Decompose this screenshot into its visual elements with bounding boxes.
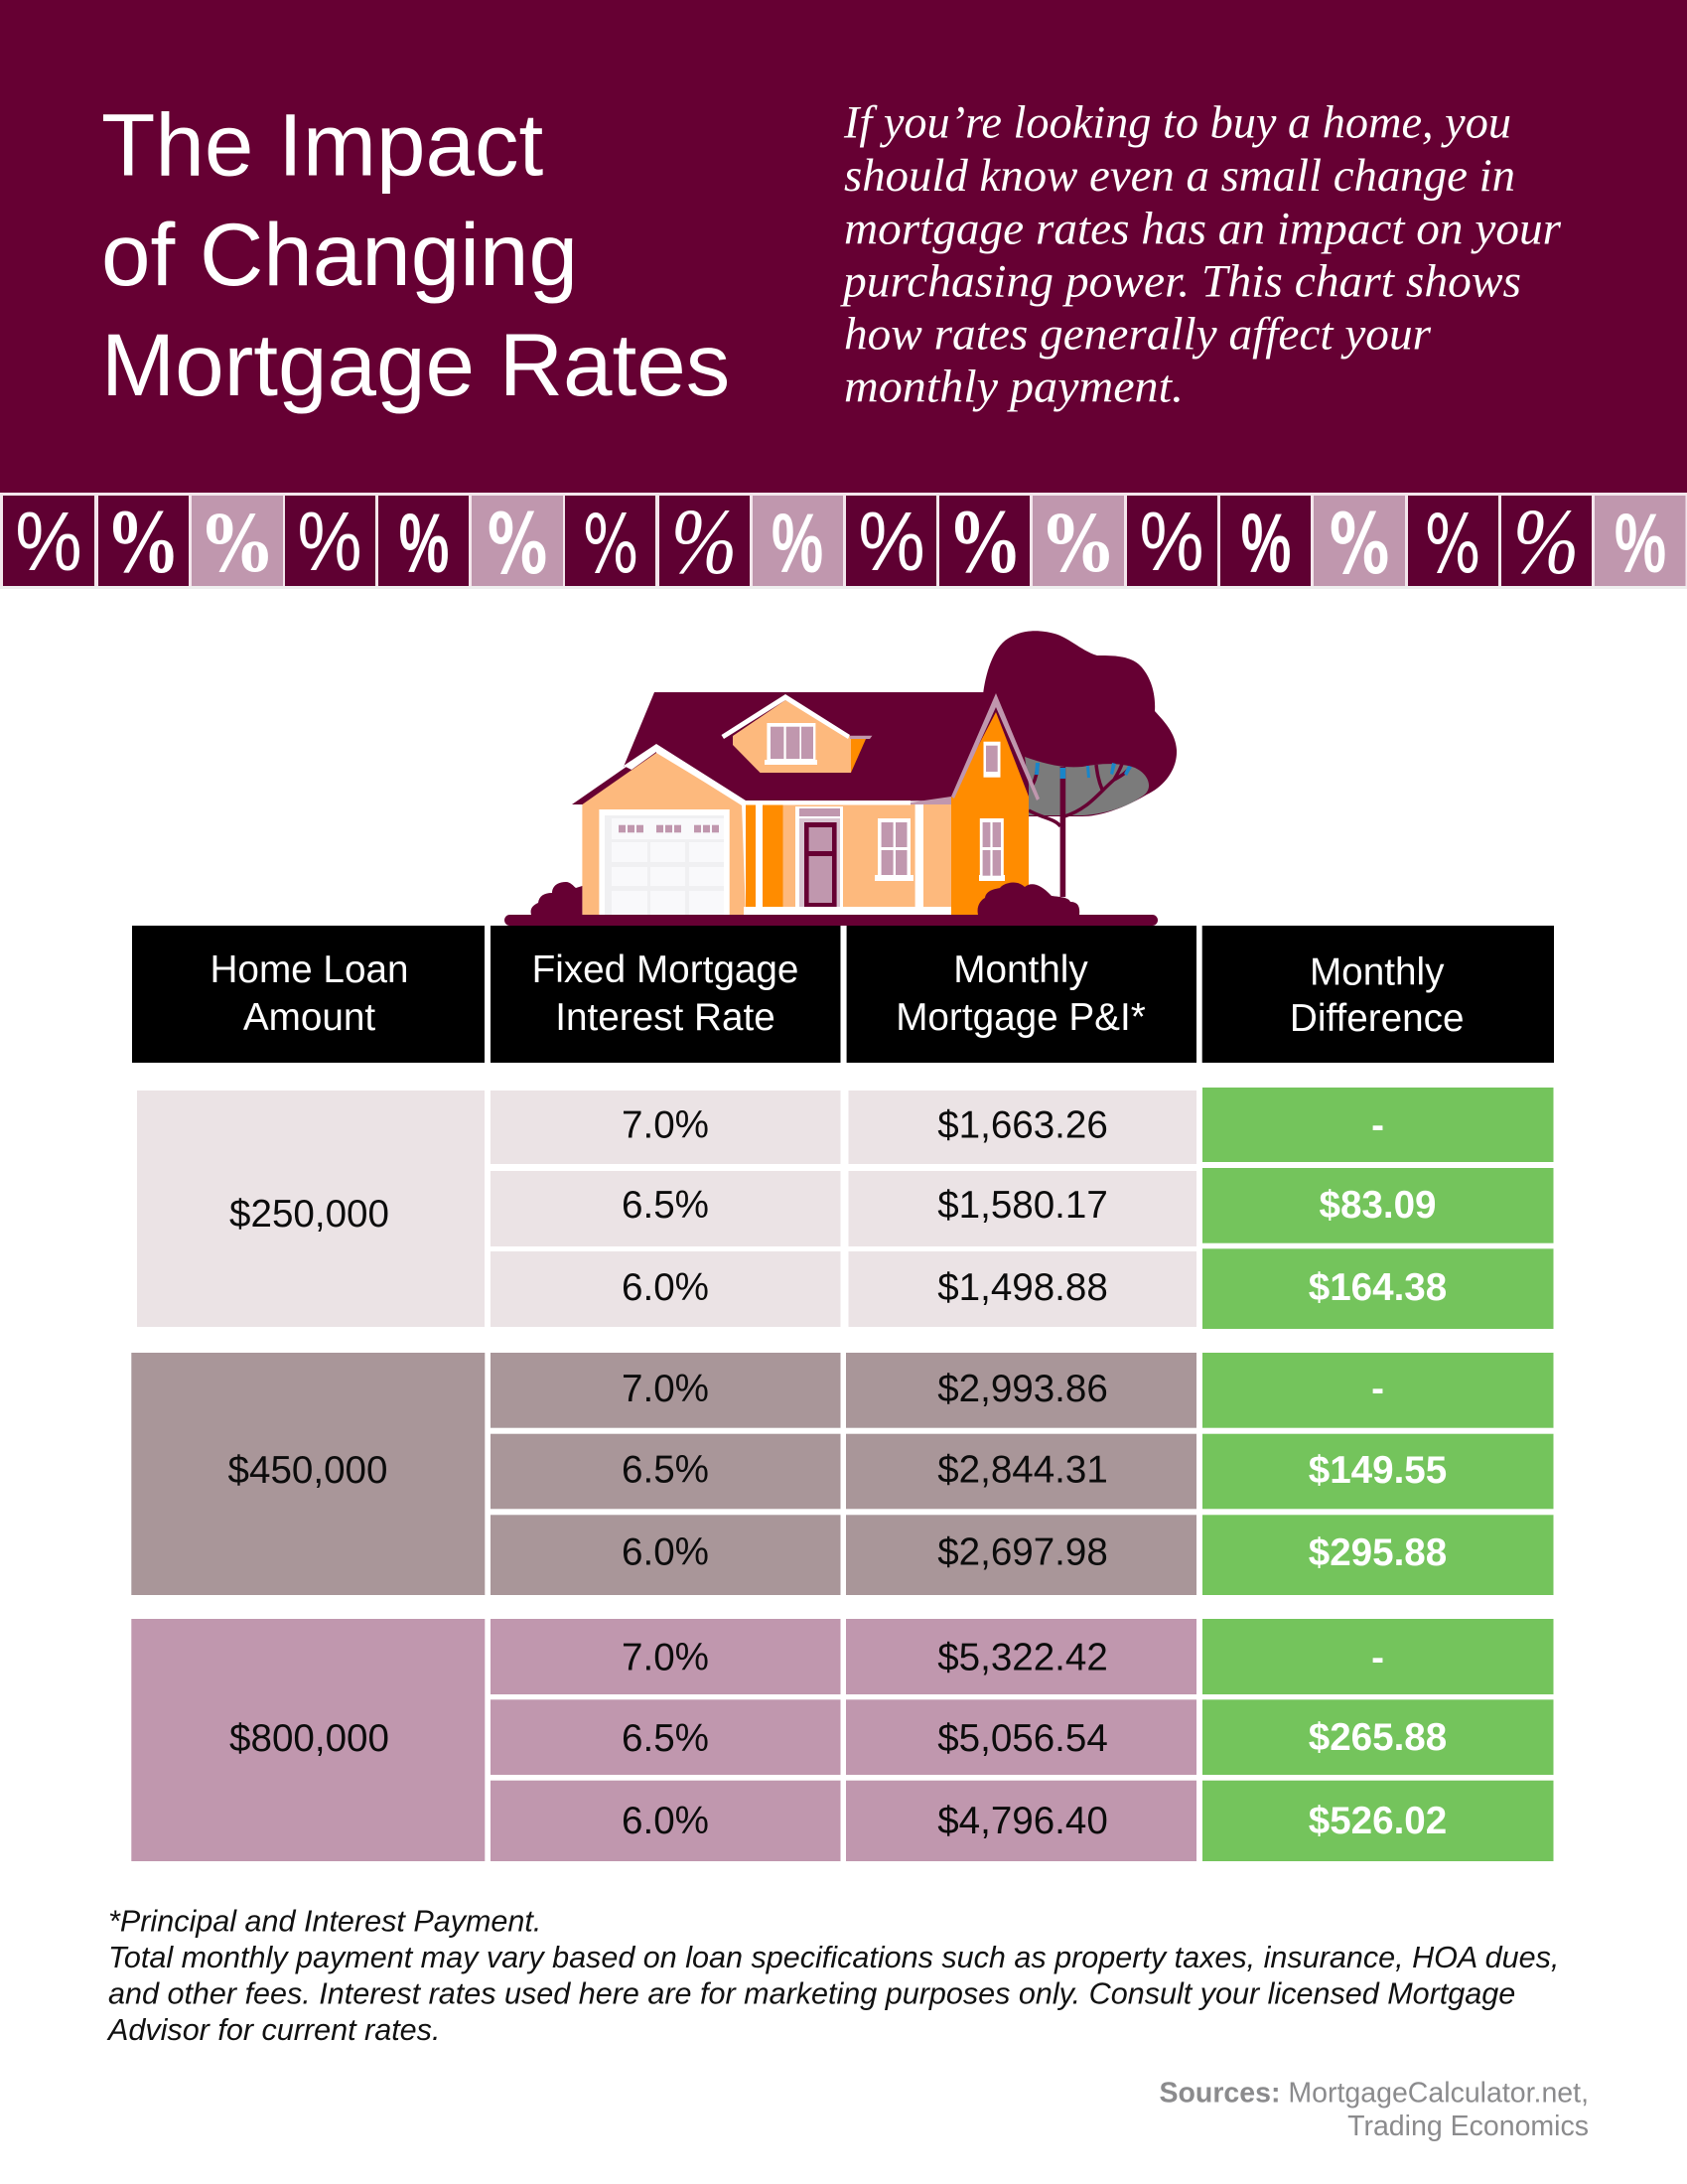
percent sign tile strip: % — [772, 498, 823, 591]
table group: $450,000: 6.0% — [622, 1531, 709, 1573]
title: The Impact — [101, 95, 543, 195]
porch window — [875, 818, 914, 881]
table group: $250,000: $164.38 — [1309, 1266, 1447, 1309]
table group: $450,000: $2,697.98 — [937, 1531, 1108, 1573]
table group: $450,000: $149.55 — [1309, 1449, 1447, 1492]
bushes — [531, 882, 582, 915]
intro paragraph: monthly payment. — [844, 362, 1184, 413]
intro paragraph: should know even a small change in — [844, 150, 1515, 202]
table group: $800,000: $265.88 — [1309, 1716, 1447, 1759]
table group: $800,000: $526.02 — [1309, 1800, 1447, 1842]
footnote: Advisor for current rates. — [106, 2013, 440, 2047]
table group: $800,000: $800,000 — [229, 1717, 389, 1760]
title: Mortgage Rates — [101, 315, 730, 414]
intro paragraph: mortgage rates has an impact on your — [844, 203, 1562, 254]
table group: $800,000: - — [1371, 1637, 1384, 1679]
gable trim — [951, 693, 1040, 801]
percent sign tile strip: % — [947, 492, 1023, 593]
ground — [504, 915, 1158, 926]
table header row — [132, 926, 1554, 1063]
percent sign tile strip: % — [1330, 497, 1389, 594]
table group: $450,000: $450,000 — [228, 1449, 387, 1492]
table header row: Amount — [243, 996, 375, 1039]
table group: $450,000: 7.0% — [622, 1368, 709, 1410]
sources: Trading Economics — [1347, 2111, 1589, 2142]
table group: $450,000 — [131, 1353, 1553, 1595]
percent sign tile strip: % — [1046, 500, 1111, 590]
percent sign tile strip — [0, 490, 1687, 594]
title: of Changing — [101, 205, 578, 304]
main roof — [624, 692, 1029, 802]
percent sign tile strip: % — [858, 495, 925, 588]
table group: $250,000: $1,580.17 — [937, 1184, 1108, 1227]
house illustration — [504, 631, 1177, 926]
percent sign tile strip: % — [1513, 490, 1579, 593]
table group: $250,000: $83.09 — [1319, 1184, 1436, 1227]
table group: $450,000: $2,844.31 — [937, 1448, 1108, 1492]
intro paragraph: If you’re looking to buy a home, you — [843, 97, 1511, 149]
garage door — [599, 809, 730, 915]
intro paragraph — [840, 97, 1562, 413]
table header row: Fixed Mortgage — [532, 948, 798, 991]
porch wall — [746, 804, 951, 907]
table header row: Mortgage P&I* — [896, 996, 1146, 1039]
header panel — [0, 0, 1687, 493]
tree — [983, 631, 1177, 897]
front door — [795, 806, 843, 907]
intro paragraph: purchasing power. This chart shows — [840, 256, 1521, 308]
table header row: Monthly — [1310, 951, 1445, 993]
table group: $800,000: 6.5% — [622, 1717, 709, 1760]
dormer — [721, 694, 872, 773]
table group: $800,000: 6.0% — [622, 1800, 709, 1842]
table group: $800,000: $5,322.42 — [937, 1637, 1108, 1678]
table group: $250,000: 6.5% — [622, 1184, 709, 1227]
table group: $450,000: $295.88 — [1309, 1531, 1447, 1574]
table group: $800,000: $5,056.54 — [937, 1717, 1108, 1760]
percent sign tile strip: % — [105, 492, 181, 593]
table header row: Monthly — [953, 948, 1088, 991]
table group: $800,000: 7.0% — [622, 1637, 709, 1678]
footnote: and other fees. Interest rates used here are for marketing purposes only. Consult your licensed Mortgage — [108, 1976, 1515, 2010]
right gable wall — [951, 712, 1029, 915]
side windows — [979, 742, 1005, 881]
table group: $250,000: $1,498.88 — [937, 1266, 1108, 1309]
table group: $250,000: 6.0% — [622, 1266, 709, 1309]
percent sign tile strip: % — [1424, 498, 1481, 591]
table group: $250,000: $1,663.26 — [937, 1104, 1108, 1146]
title — [101, 95, 730, 414]
percent sign tile strip: % — [671, 490, 737, 593]
table group: $450,000: - — [1371, 1368, 1384, 1410]
table group: $800,000 — [131, 1619, 1553, 1861]
table group: $250,000: - — [1371, 1104, 1384, 1147]
table group: $450,000: 6.5% — [622, 1448, 709, 1492]
footnote: *Principal and Interest Payment. — [108, 1904, 541, 1938]
sources: Sources: MortgageCalculator.net, — [1160, 2078, 1589, 2110]
percent sign tile strip: % — [488, 497, 547, 594]
footnote: Total monthly payment may vary based on loan specifications such as property taxes, insurance, HOA dues, — [108, 1941, 1559, 1974]
table group: $250,000 — [137, 1088, 1553, 1329]
percent sign tile strip: % — [15, 495, 82, 588]
table header row: Interest Rate — [555, 996, 775, 1039]
porch beam, posts and floor — [742, 801, 951, 915]
percent sign tile strip: % — [399, 498, 449, 591]
percent sign tile strip: % — [582, 498, 639, 591]
sources — [1160, 2078, 1589, 2142]
percent sign tile strip: % — [1140, 495, 1203, 588]
table header row: Difference — [1290, 997, 1465, 1040]
left gable — [572, 746, 656, 804]
footnote — [106, 1904, 1559, 2047]
table group: $450,000: $2,993.86 — [937, 1368, 1108, 1410]
table group: $250,000: 7.0% — [622, 1104, 709, 1146]
intro paragraph: how rates generally affect your — [844, 308, 1432, 360]
table group: $800,000: $4,796.40 — [937, 1800, 1108, 1842]
percent sign tile strip: % — [205, 500, 270, 590]
percent sign tile strip: % — [1241, 498, 1291, 591]
percent sign tile strip: % — [298, 495, 361, 588]
table header row: Home Loan — [210, 948, 409, 991]
table group: $250,000: $250,000 — [229, 1193, 389, 1236]
percent sign tile strip: % — [1615, 498, 1666, 591]
